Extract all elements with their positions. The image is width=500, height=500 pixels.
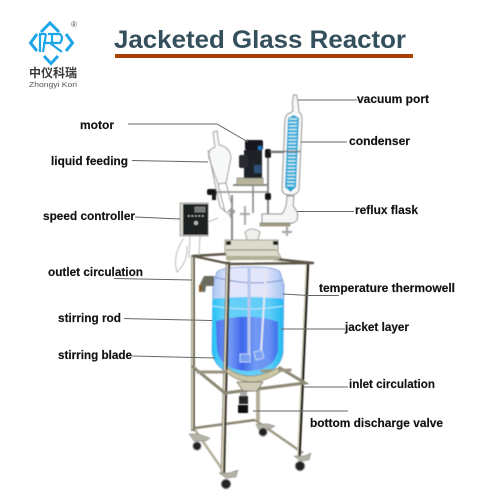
label: bottom discharge valve: bottom discharge valve bbox=[310, 416, 443, 430]
motor bbox=[237, 140, 263, 185]
reactor lid bbox=[225, 229, 281, 260]
controller wires bbox=[176, 218, 218, 272]
stirring rod bbox=[248, 268, 250, 356]
label: condenser: condenser bbox=[349, 134, 410, 148]
label: speed controller: speed controller bbox=[43, 209, 135, 223]
label: inlet circulation: inlet circulation bbox=[349, 377, 435, 391]
vessel inner liquid bbox=[216, 317, 278, 371]
logo mark bbox=[30, 23, 72, 64]
label: motor: motor bbox=[80, 118, 114, 132]
label: liquid feeding: liquid feeding bbox=[51, 154, 128, 168]
leader lines bbox=[114, 100, 357, 411]
label: jacket layer: jacket layer bbox=[344, 320, 409, 334]
stirring blade bbox=[240, 350, 264, 362]
logo bbox=[29, 20, 77, 89]
title: Jacketed Glass Reactor bbox=[114, 26, 406, 54]
label: stirring blade: stirring blade bbox=[58, 348, 132, 362]
vessel water bbox=[212, 297, 284, 376]
outlet valve bbox=[199, 276, 214, 292]
liquid feeding funnel bbox=[208, 131, 250, 225]
jacketed vessel bbox=[212, 267, 284, 376]
support rods bbox=[216, 150, 290, 240]
back frame and lower bars bbox=[195, 390, 303, 472]
bottom flange and discharge valve bbox=[226, 368, 280, 413]
condenser coil bbox=[285, 115, 299, 192]
company name chinese: 中仪科瑞 bbox=[29, 65, 77, 80]
speed controller bbox=[180, 203, 208, 236]
label: vacuum port: vacuum port bbox=[357, 92, 429, 106]
title underline bbox=[115, 54, 413, 58]
frame posts and top bbox=[192, 254, 313, 472]
label: stirring rod: stirring rod bbox=[58, 311, 121, 325]
label: temperature thermowell: temperature thermowell bbox=[319, 281, 455, 295]
reactor apparatus bbox=[176, 95, 313, 489]
casters bbox=[189, 424, 311, 489]
company name latin: Zhongyi Kori bbox=[29, 80, 77, 89]
inner glass band bbox=[214, 277, 283, 283]
reflux flask bbox=[260, 196, 298, 236]
label: outlet circulation: outlet circulation bbox=[48, 265, 143, 279]
condenser bbox=[270, 95, 302, 195]
registered mark: ® bbox=[71, 20, 77, 29]
label: reflux flask: reflux flask bbox=[355, 203, 418, 217]
clamps bbox=[207, 149, 271, 200]
thermowell bbox=[261, 270, 266, 352]
